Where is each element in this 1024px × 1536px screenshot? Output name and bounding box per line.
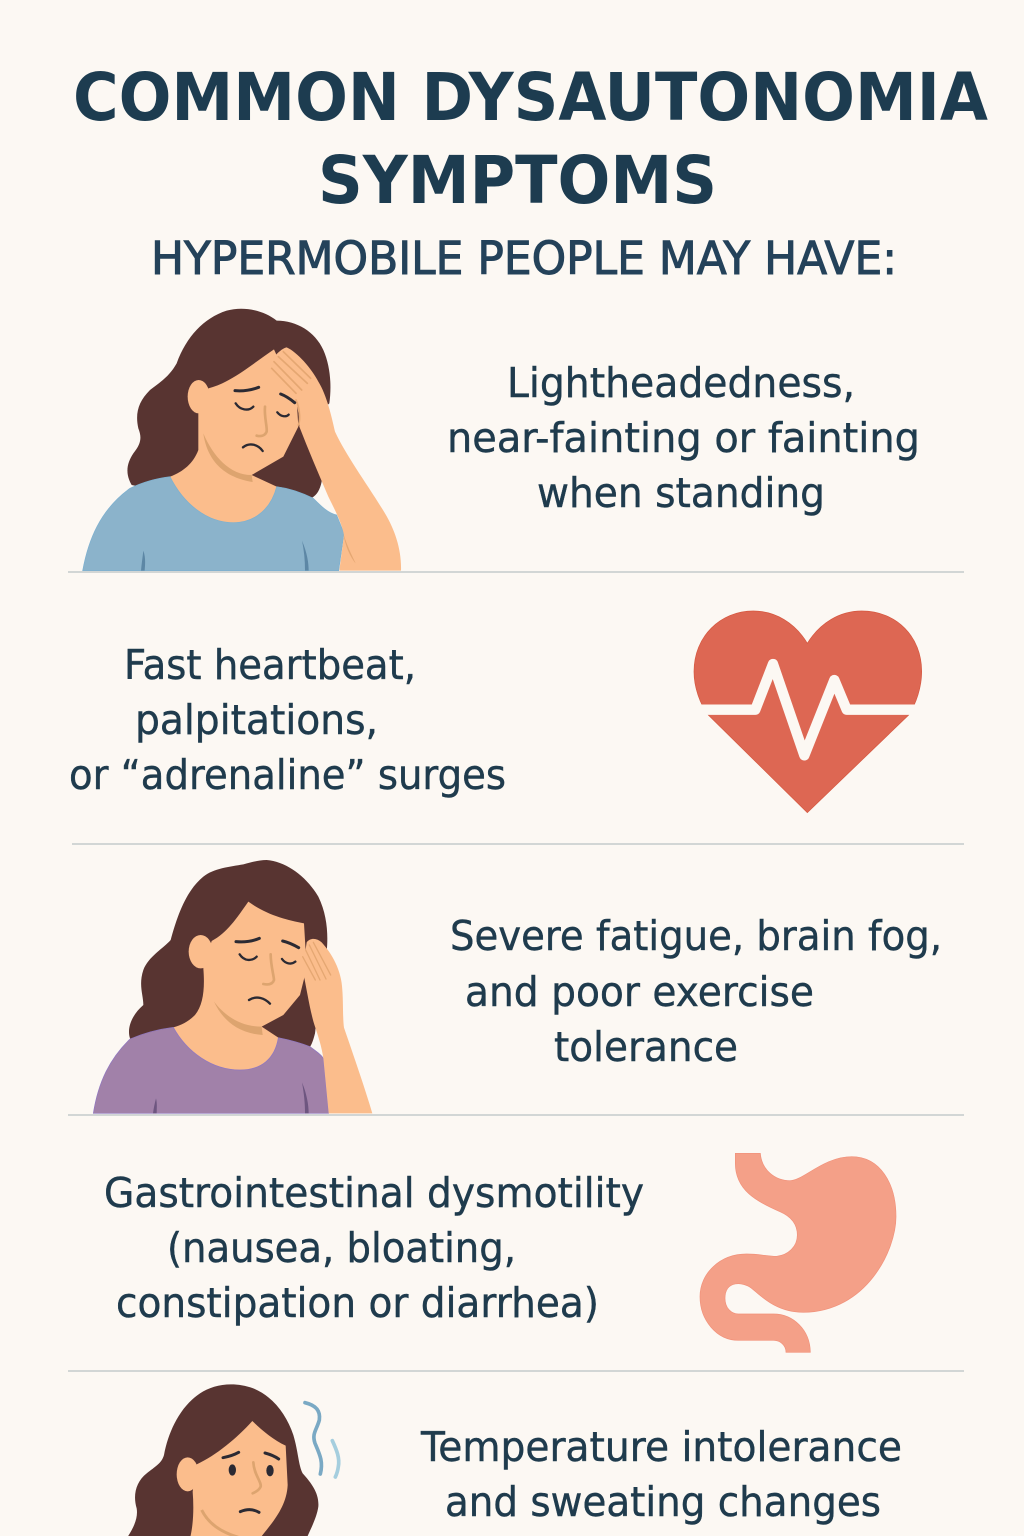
text: temperature intolerance: [420, 1423, 902, 1526]
icon: heart with pulse line: [694, 611, 922, 813]
title: [73, 59, 988, 219]
text: fast heartbeat: or “adrenaline” surges: [69, 751, 506, 799]
illustration: woman with worried face and heat waves: [127, 1384, 339, 1536]
title: SYMPTOMS: [318, 142, 717, 219]
icon: stomach: [700, 1153, 896, 1352]
text: gastrointestinal dysmotility: Gastrointestinal dysmotility: [104, 1169, 644, 1217]
text: fast heartbeat: palpitations,: [135, 696, 378, 744]
text: severe fatigue: Severe fatigue, brain fog,: [450, 912, 942, 960]
title: COMMON DYSAUTONOMIA: [73, 59, 988, 136]
text: lightheadedness: [447, 359, 920, 517]
text: lightheadedness: Lightheadedness,: [507, 359, 855, 407]
text: severe fatigue: [450, 912, 942, 1071]
text: fast heartbeat: Fast heartbeat,: [124, 641, 416, 689]
text: gastrointestinal dysmotility: (nausea, bloating,: [167, 1224, 516, 1272]
text: severe fatigue: and poor exercise: [465, 968, 814, 1016]
text: temperature intolerance: and sweating changes: [445, 1478, 881, 1526]
text: fast heartbeat: [69, 641, 506, 799]
text: lightheadedness: when standing: [537, 469, 825, 517]
illustration: woman with hand on temple, purple shirt: [93, 860, 372, 1113]
text: gastrointestinal dysmotility: constipation or diarrhea): [116, 1279, 599, 1327]
text: gastrointestinal dysmotility: [104, 1169, 644, 1327]
text: lightheadedness: near-fainting or fainting: [447, 414, 920, 462]
text: temperature intolerance: Temperature intolerance: [420, 1423, 902, 1471]
text: severe fatigue: tolerance: [554, 1023, 738, 1071]
subtitle: HYPERMOBILE PEOPLE MAY HAVE:: [151, 232, 897, 285]
illustration: woman with hand on forehead, blue shirt: [83, 309, 401, 571]
